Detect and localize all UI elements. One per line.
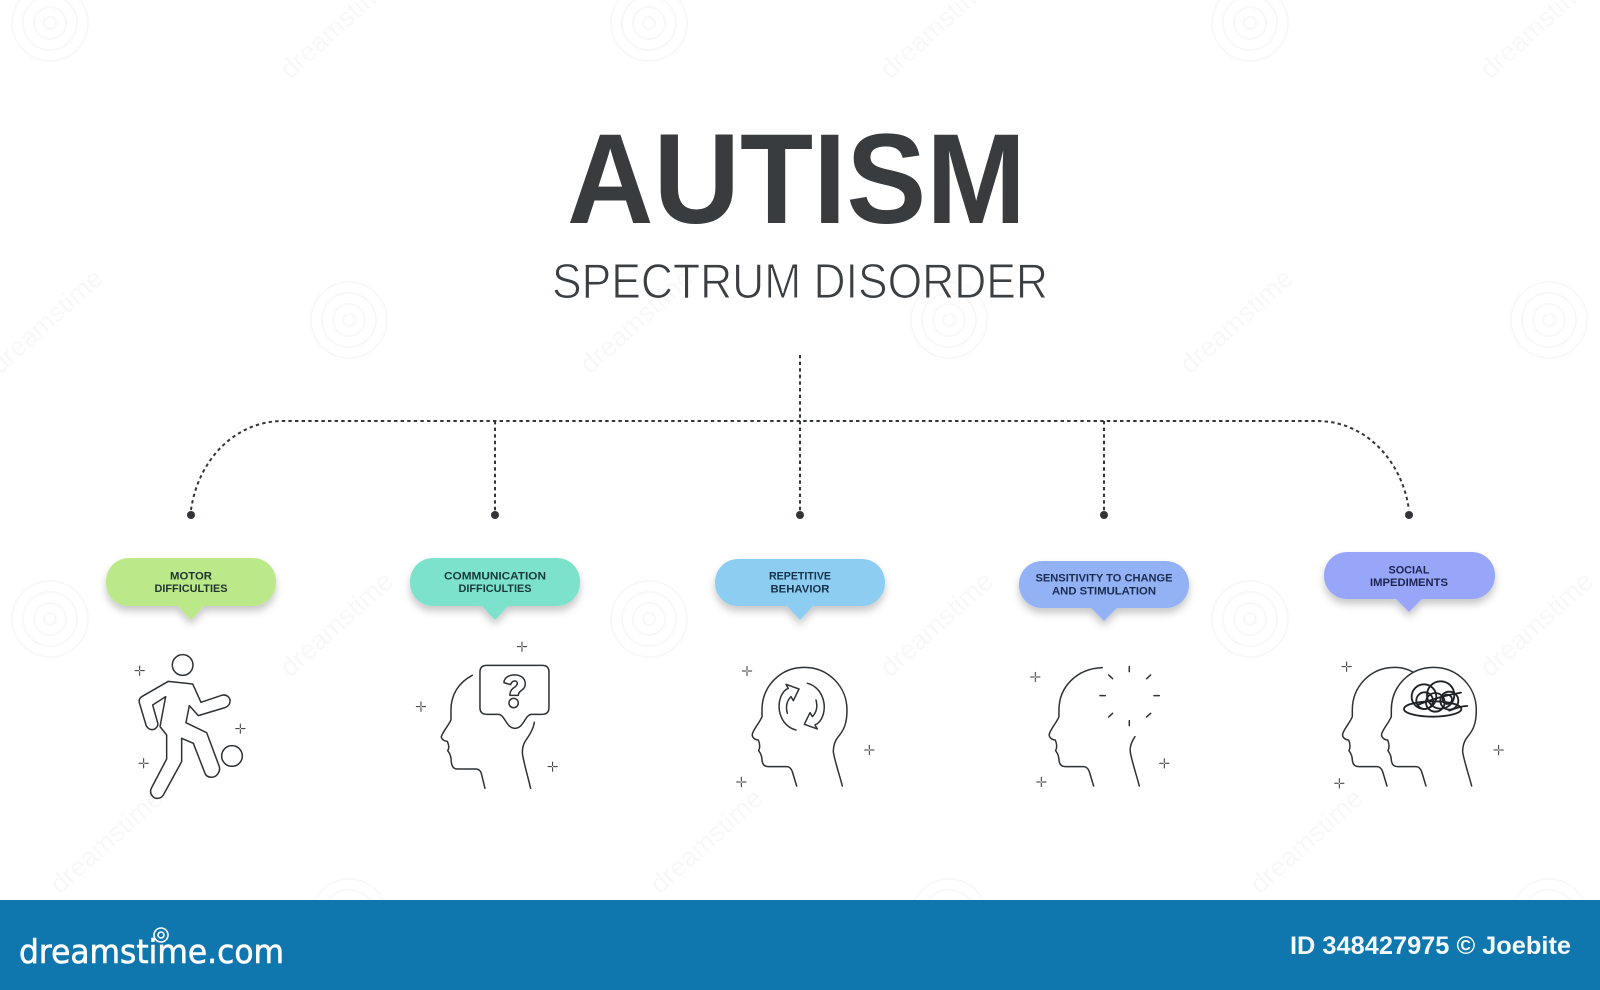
watermark pattern: dreamstime (874, 566, 999, 682)
watermark pattern: dreamstime (1244, 783, 1369, 899)
watermark pattern: dreamstime (1474, 566, 1599, 682)
label bubble: communication difficulties: DIFFICULTIES (458, 583, 532, 595)
label bubble: repetitive behavior (715, 559, 885, 620)
footer credit: ID 348427975 © Joebite (1290, 932, 1571, 960)
label bubble: repetitive behavior: BEHAVIOR (770, 584, 830, 596)
label bubble: communication difficulties (410, 558, 580, 620)
label bubble: repetitive behavior: REPETITIVE (769, 571, 831, 583)
panel: communication difficulties (410, 558, 580, 788)
label bubble: motor difficulties (106, 558, 276, 620)
footer logo: dreamstime.com: dreamstime.com (19, 932, 284, 971)
panel: sensitivity to change and stimulation (1019, 561, 1189, 787)
label bubble: sensitivity to change and stimulation: AND STIMULATION (1052, 586, 1156, 598)
panel: social impediments (1324, 552, 1503, 788)
label bubble: sensitivity to change and stimulation: SENSITIVITY TO CHANGE (1036, 573, 1172, 585)
icon: head with radiating lines (1031, 667, 1169, 787)
label bubble: social impediments: IMPEDIMENTS (1370, 577, 1448, 589)
watermark pattern: dreamstime (274, 566, 399, 682)
label bubble: social impediments (1324, 552, 1495, 612)
label bubble: motor difficulties: MOTOR (170, 570, 212, 582)
watermark pattern: dreamstime (574, 263, 699, 379)
connector tree (187, 355, 1413, 519)
label bubble: sensitivity to change and stimulation (1019, 561, 1189, 621)
footer bar (0, 900, 1600, 990)
icon: person kicking a ball (135, 655, 245, 798)
panel: motor difficulties (106, 558, 276, 798)
watermark pattern: dreamstime (644, 783, 769, 899)
icon: head with question speech bubble (416, 642, 557, 788)
watermark pattern: dreamstime (1174, 263, 1299, 379)
icon: two heads with tangled scribble (1335, 662, 1503, 788)
watermark pattern: dreamstime (44, 783, 169, 899)
panel: repetitive behavior (715, 559, 885, 787)
icon: head with circular arrows (737, 666, 874, 787)
label bubble: communication difficulties: COMMUNICATION (444, 570, 546, 582)
label bubble: social impediments: SOCIAL (1388, 564, 1430, 576)
title: AUTISM (567, 108, 1026, 251)
subtitle: SPECTRUM DISORDER (552, 255, 1048, 309)
label bubble: motor difficulties: DIFFICULTIES (154, 583, 228, 595)
